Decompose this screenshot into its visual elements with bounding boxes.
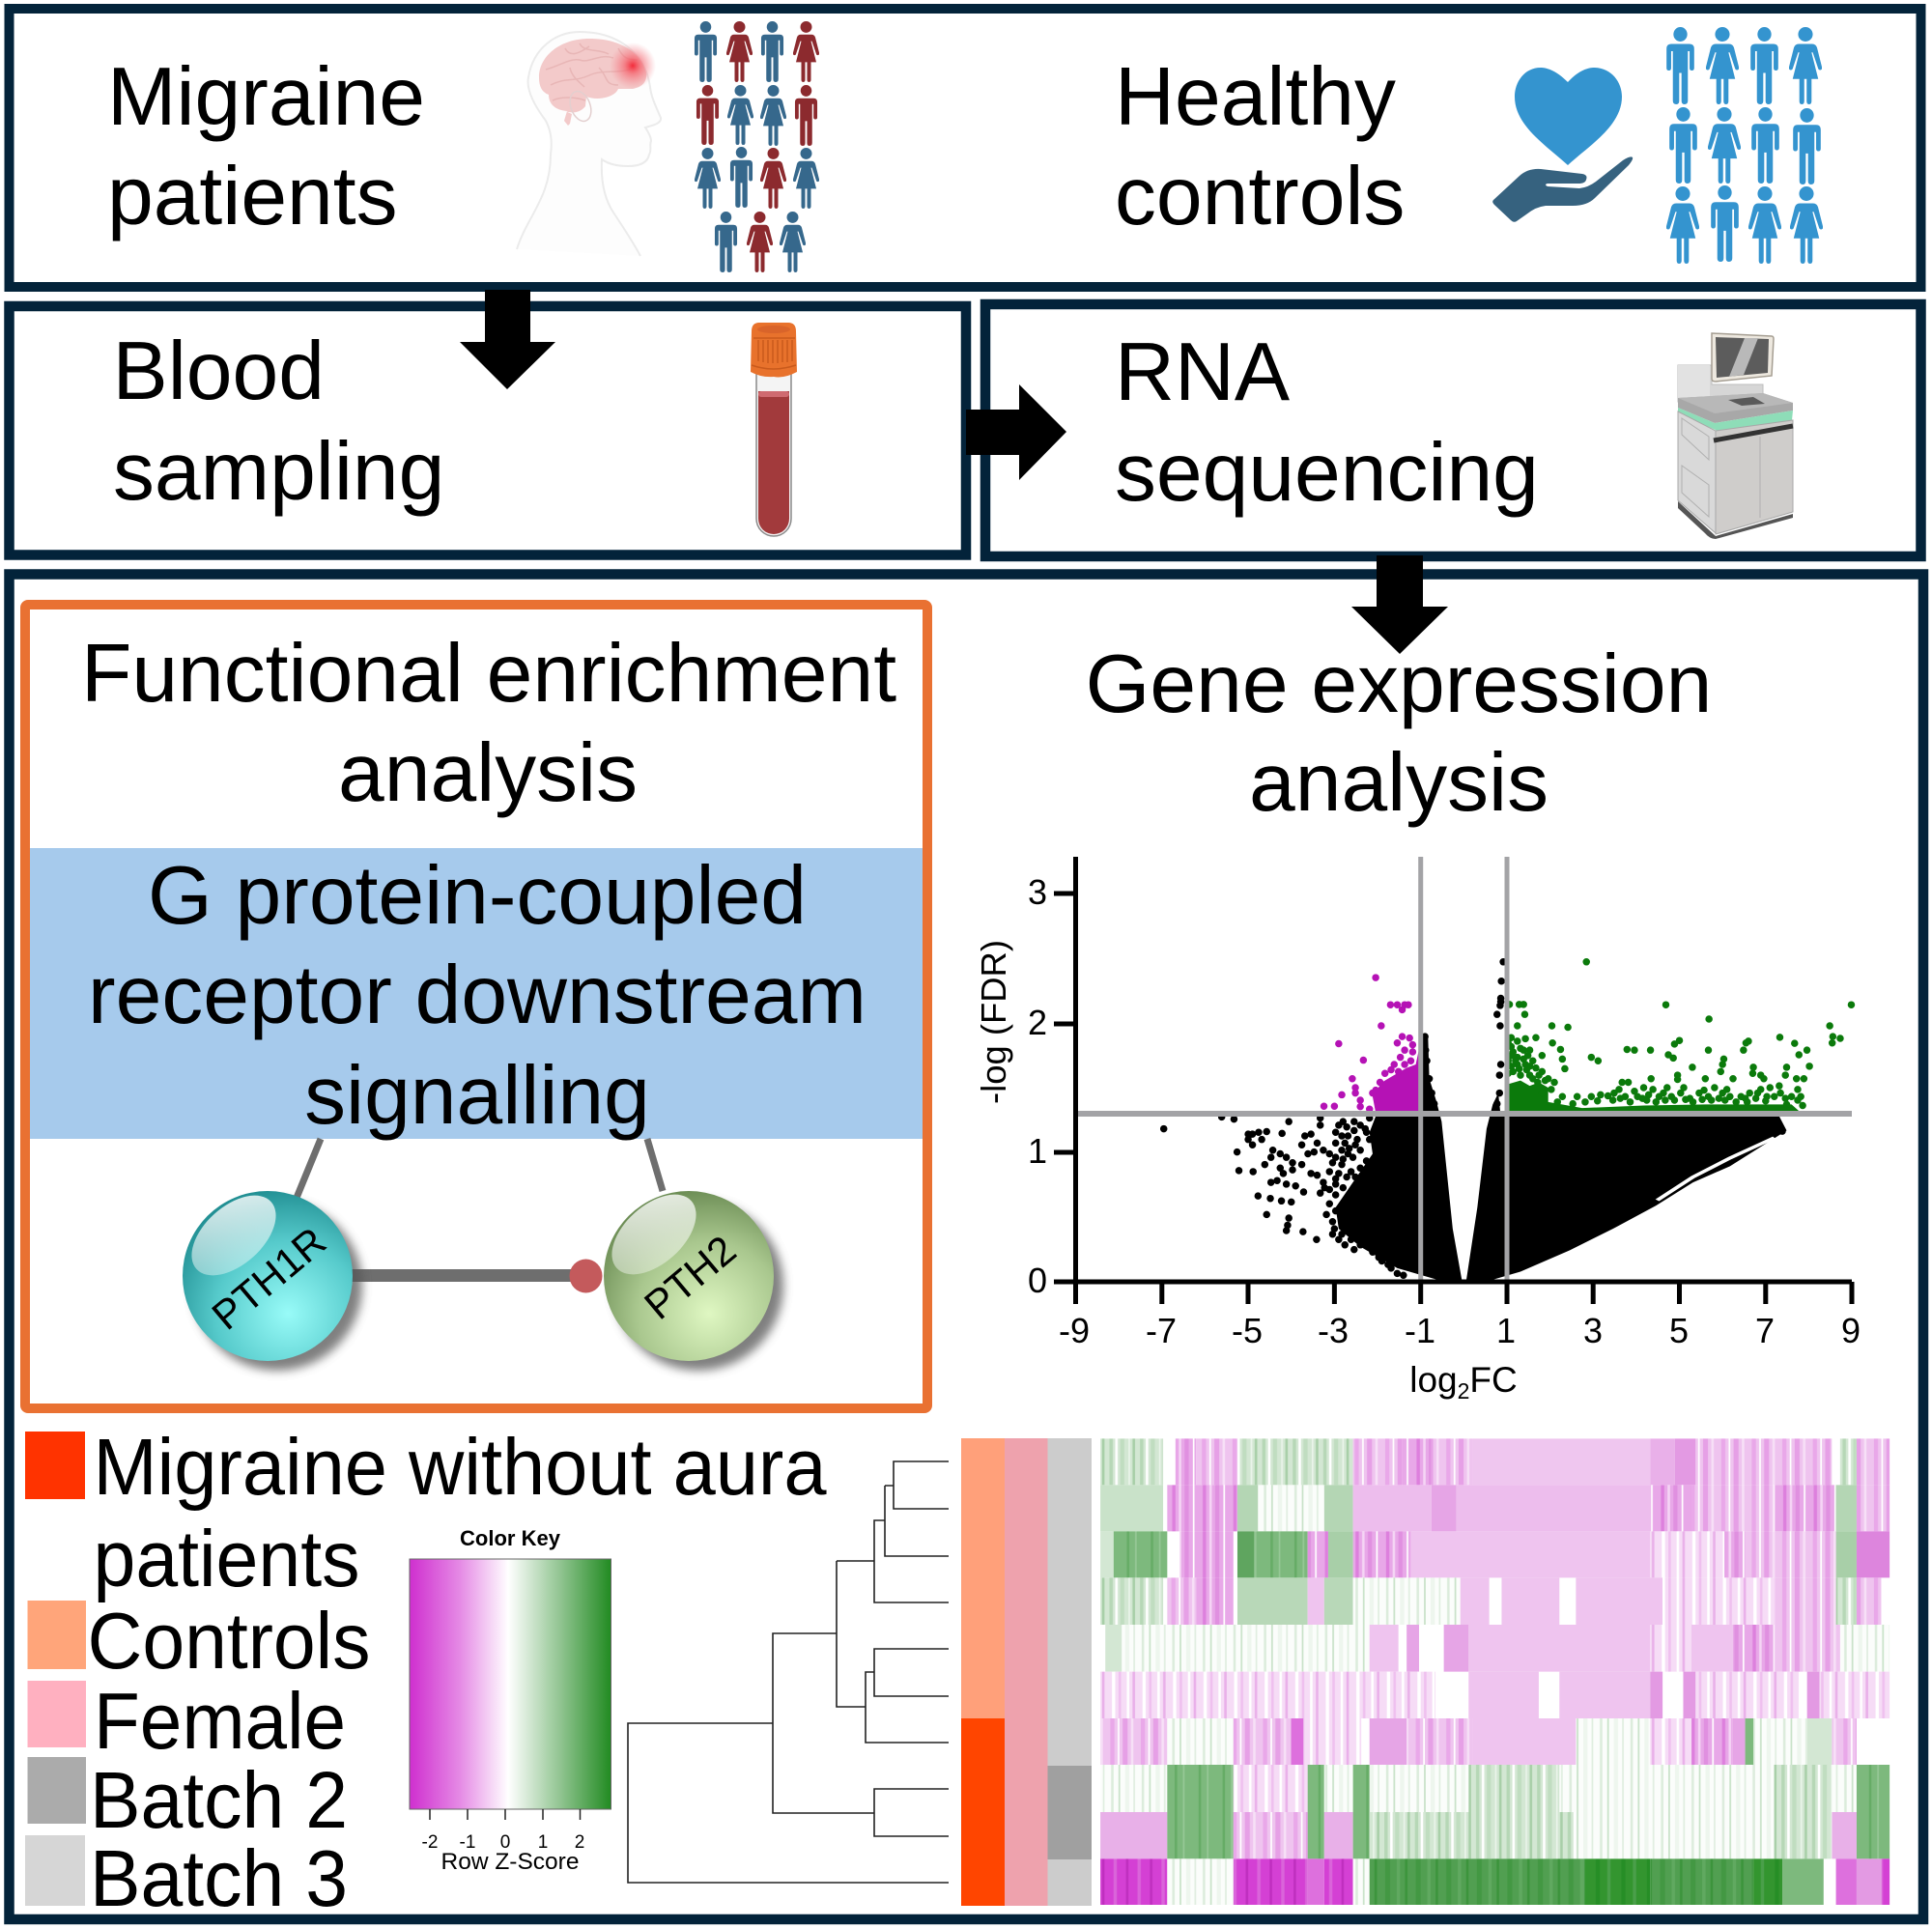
legend: color key: -1 [460,1832,475,1853]
legend item: migraine without aura patients: patients [93,1514,359,1603]
heading: RNA sequencing [1115,326,1539,519]
icon: healthy control figures [1666,27,1823,264]
heading: RNA sequencing: RNA [1115,326,1291,418]
sample annotation bars [961,1438,1092,1906]
panel: blood sampling [10,306,966,554]
heading: functional enrichment analysis: analysis [338,726,638,819]
data points [1164,962,1851,1281]
text: enriched pathway name [88,849,867,1142]
arrow: RNA sequencing to gene expression analysis [1351,555,1448,654]
panel: RNA sequencing [985,304,1920,556]
heading: functional enrichment analysis [81,627,896,819]
x axis labels: -3 [1318,1311,1349,1350]
heading: functional enrichment analysis: Functional enrichment [81,627,896,720]
text: enriched pathway name: receptor downstream [88,949,867,1041]
heading: gene expression analysis: analysis [1249,736,1548,829]
x axis labels: 3 [1583,1311,1603,1350]
x axis labels: 5 [1669,1311,1689,1350]
x axis labels: 1 [1496,1311,1516,1350]
legend item: migraine without aura patients: Migraine without aura [93,1422,827,1512]
heading: healthy controls: controls [1115,150,1405,242]
icon: migraine patient figures [695,21,819,272]
legend: color key: 1 [538,1832,548,1853]
node: PTH2 [597,1179,774,1361]
y axis labels: 0 [1028,1261,1047,1300]
x axis labels: -9 [1059,1311,1090,1350]
icon: blood tube [751,323,797,536]
icon: head with migraine brain [517,32,661,256]
heading: gene expression analysis: Gene expression [1086,638,1712,730]
x axis labels: -7 [1146,1311,1177,1350]
legend item: controls: Controls [87,1596,371,1686]
icon: sequencer machine [1678,333,1793,539]
heading: blood sampling: sampling [113,425,444,518]
legend: color key [410,1526,611,1875]
legend item: migraine without aura patients [25,1422,827,1603]
heading: migraine patients [107,50,425,242]
heading: migraine patients: patients [107,150,398,242]
node: PTH2: PTH2 [636,1227,745,1328]
node: PTH1R [177,1180,353,1361]
network: PTH1R and PTH2 interaction [177,1139,783,1371]
x axis labels: -1 [1405,1311,1435,1350]
x axis title: 2 [1458,1378,1469,1403]
legend: color key: 0 [500,1832,510,1853]
heading: blood sampling [112,325,444,518]
x axis labels [1059,1311,1861,1350]
y axis labels: 3 [1028,872,1047,912]
threshold lines [1421,857,1507,1282]
y axis labels [1028,872,1047,1300]
legend: color key: 2 [575,1832,584,1853]
x axis title: FC [1469,1360,1518,1400]
chart: volcano plot [974,857,1861,1403]
y axis title: -log (FDR) [974,940,1013,1104]
panel: analysis results [10,574,1923,1923]
x axis title: log [1409,1360,1458,1400]
panel: migraine patients and healthy controls [10,9,1920,287]
band: pathway highlight [30,848,923,1139]
x axis labels: 7 [1755,1311,1775,1350]
legend: color key: Row Z-Score [441,1849,579,1875]
x axis labels: -5 [1232,1311,1263,1350]
legend item: batch 2: Batch 2 [90,1755,348,1845]
legend item: female: Female [94,1676,346,1766]
node: PTH1R: PTH1R [203,1218,334,1339]
heading: healthy controls: Healthy [1115,50,1396,143]
heading: blood sampling: Blood [112,325,325,417]
panel: functional enrichment analysis [25,605,927,1408]
legend: color key: Color Key [460,1526,561,1550]
text: enriched pathway name: signalling [304,1049,650,1142]
x axis labels: 9 [1841,1311,1861,1350]
icon: heart in hand [1492,68,1633,222]
heading: gene expression analysis [1086,638,1712,829]
legend: sample annotations [25,1422,827,1923]
arrow: migraine cohort to blood sampling [460,290,555,389]
y axis labels: 2 [1028,1003,1047,1042]
y axis labels: 1 [1028,1131,1047,1171]
legend: color key: -2 [422,1832,438,1853]
heading: healthy controls [1115,50,1405,242]
heatmap [1100,1438,1889,1905]
heading: RNA sequencing: sequencing [1115,426,1539,519]
heading: migraine patients: Migraine [107,50,425,143]
text: enriched pathway name: G protein-coupled [148,849,807,942]
edge end marker [570,1260,603,1292]
axes [1054,857,1852,1304]
legend item: batch 3: Batch 3 [90,1833,348,1923]
dendrogram [628,1461,949,1883]
arrow: blood sampling to RNA sequencing [966,384,1066,480]
